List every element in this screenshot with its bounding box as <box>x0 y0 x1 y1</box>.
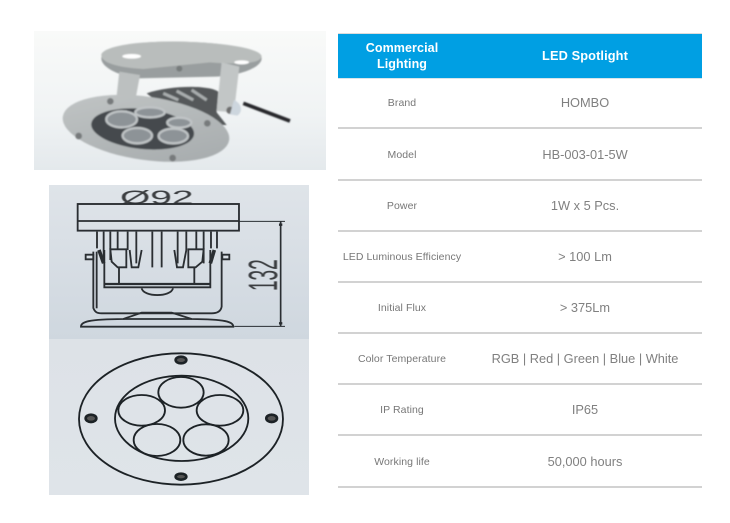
dimension label 92: Ø92 <box>120 187 194 208</box>
row: flux: > 375Lm <box>560 300 610 315</box>
header: category <box>366 41 438 70</box>
front view drawing <box>79 353 283 485</box>
dimension label 132: 132 <box>240 259 286 291</box>
cable <box>243 103 290 121</box>
row: color temperature: RGB | Red | Green | Blue | White <box>492 351 678 366</box>
lamp rim <box>58 85 234 171</box>
side view drawing panel <box>49 185 309 339</box>
row: color temperature: Color Temperature <box>358 353 446 365</box>
row: efficiency <box>338 232 702 283</box>
header: product: LED Spotlight <box>542 48 628 63</box>
row: working life <box>338 437 702 488</box>
row: brand <box>338 78 702 129</box>
row: brand: Brand <box>388 97 416 109</box>
inner ring <box>115 376 248 461</box>
mounting plate <box>101 42 262 78</box>
row: power: 1W x 5 Pcs. <box>551 198 619 213</box>
base <box>81 313 233 327</box>
row: working life: 50,000 hours <box>548 454 622 469</box>
LED lenses <box>106 107 191 143</box>
bracket arms <box>116 62 239 114</box>
spotlight photo <box>58 42 290 171</box>
row: IP rating <box>338 385 702 436</box>
header: category: Commercial <box>366 41 438 55</box>
lamp body <box>78 204 239 313</box>
header: category: Lighting <box>377 56 427 70</box>
row: efficiency: LED Luminous Efficiency <box>343 251 461 263</box>
front view drawing panel <box>49 339 309 495</box>
row: brand: HOMBO <box>561 95 609 110</box>
row: model: HB-003-01-5W <box>542 147 628 162</box>
row: working life: Working life <box>374 456 430 468</box>
side view dimension drawing <box>78 204 285 327</box>
row: color temperature <box>338 334 702 385</box>
screws <box>86 357 277 480</box>
rim screws <box>75 98 211 161</box>
table header <box>338 33 702 79</box>
lamp glass <box>89 104 196 154</box>
row: model <box>338 130 702 181</box>
row: model: Model <box>388 149 416 161</box>
row: power: Power <box>387 200 417 212</box>
LED circles <box>118 377 243 456</box>
dimension line 132 <box>234 221 285 326</box>
outer rim <box>79 353 283 485</box>
row: IP rating: IP65 <box>572 402 598 417</box>
row: flux: Initial Flux <box>378 302 426 314</box>
row: IP rating: IP Rating <box>380 404 424 416</box>
row: power <box>338 181 702 232</box>
product photo panel <box>34 31 326 171</box>
heat sink body <box>147 87 227 125</box>
row: efficiency: > 100 Lm <box>558 249 612 264</box>
row: flux <box>338 283 702 334</box>
